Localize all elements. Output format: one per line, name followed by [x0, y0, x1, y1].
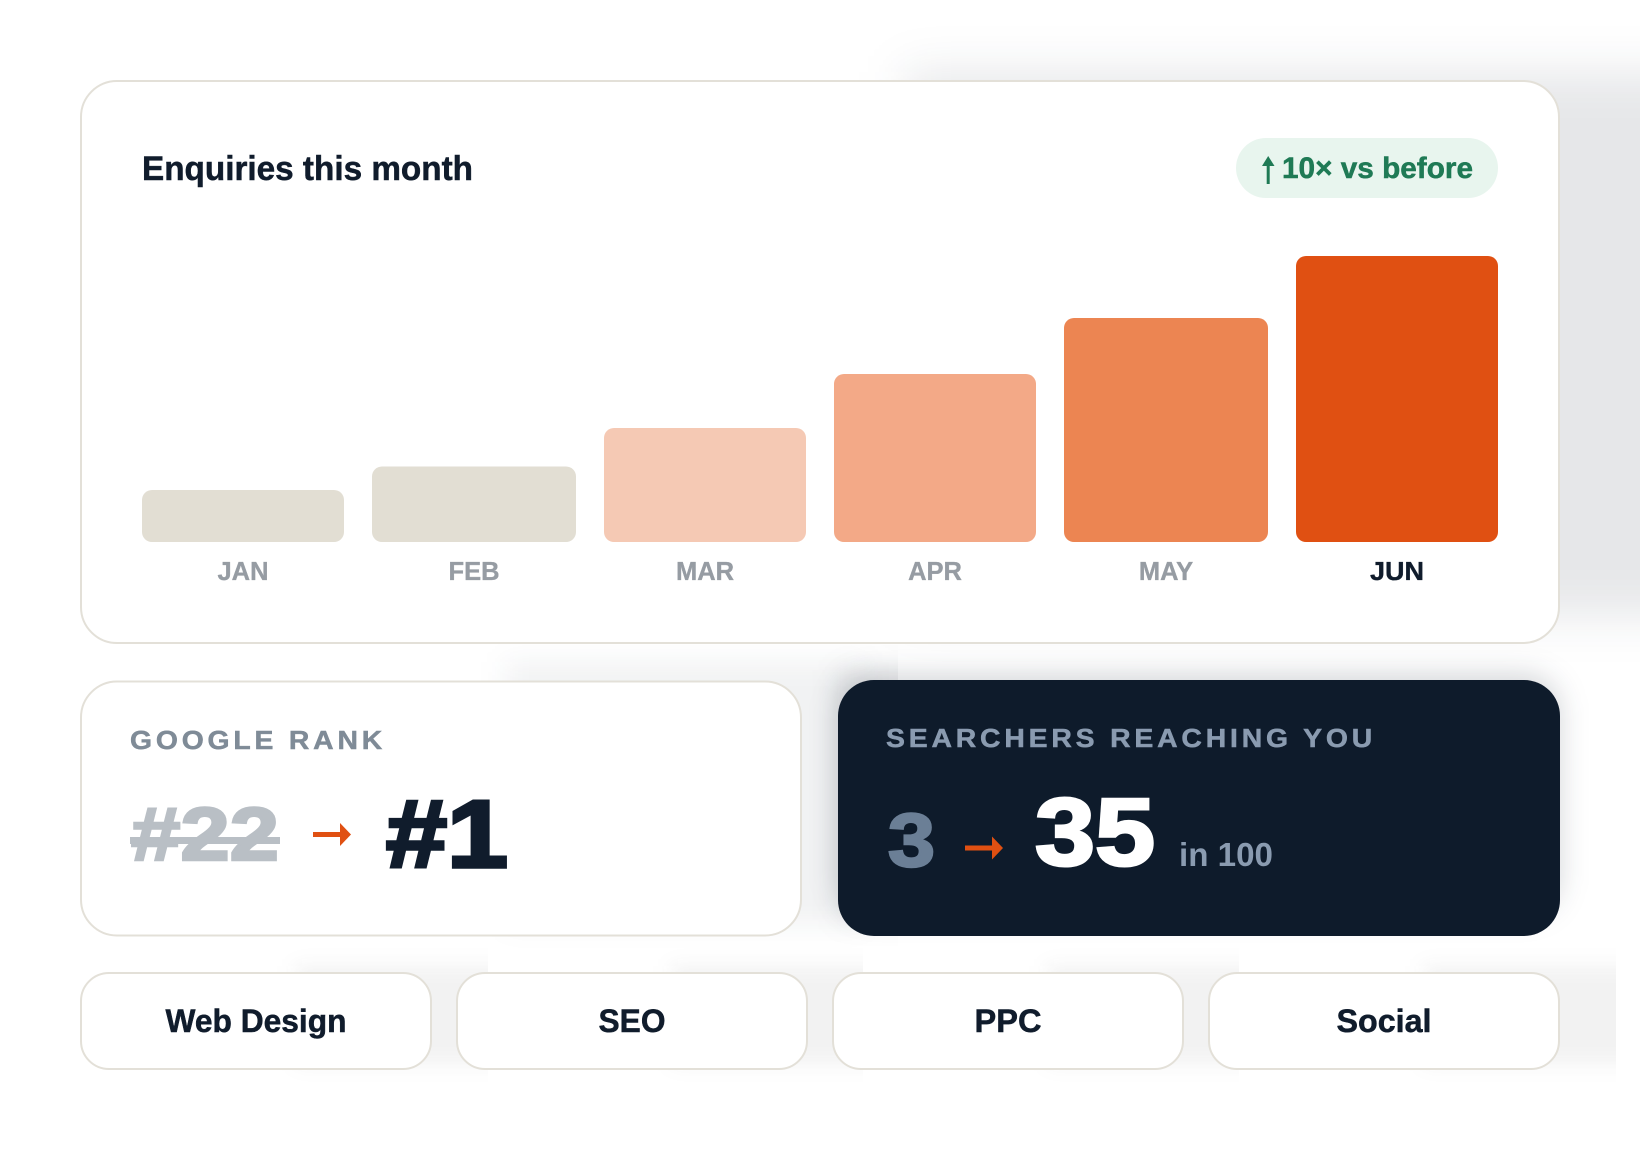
service pill: social: Social: [1336, 1003, 1432, 1039]
panel: google rank: [81, 682, 801, 936]
service pill: seo: SEO: [598, 1003, 666, 1039]
arrow: [313, 823, 351, 846]
old rank: #22 struck through: #22: [131, 792, 279, 876]
bar: May: [1064, 318, 1268, 542]
panel: searchers reaching you: [838, 680, 1560, 936]
service pill: seo: [457, 973, 807, 1069]
bar: February: [372, 466, 576, 542]
label: google rank: GOOGLE RANK: [130, 725, 386, 755]
service pill: ppc: [833, 973, 1183, 1069]
soft card shadows: [295, 72, 1640, 1064]
old value: 3: 3: [888, 798, 935, 882]
bar: March: [604, 428, 806, 542]
service pill: social: [1209, 973, 1559, 1069]
unit: in 100: in 100: [1179, 836, 1273, 873]
month labels: JAN: [217, 558, 269, 586]
service pill: web design: Web Design: [166, 1003, 346, 1039]
service pill: web design: [81, 973, 431, 1069]
month labels: [217, 558, 1424, 586]
heading: enquiries this month: Enquiries this month: [142, 150, 473, 188]
bar: January: [142, 490, 344, 542]
month labels: FEB: [448, 558, 500, 586]
bar chart: [142, 256, 1498, 586]
service pill: ppc: PPC: [974, 1003, 1042, 1039]
bar: April: [834, 374, 1036, 542]
month labels: MAR: [676, 558, 734, 586]
month labels: JUN: [1370, 558, 1424, 586]
new rank: #1: #1: [386, 781, 508, 888]
arrow: [965, 836, 1003, 860]
badge: 10x vs before: 10× vs before: [1282, 152, 1473, 185]
icon: up arrow: [1262, 156, 1274, 184]
panel: enquiries chart card: [81, 81, 1559, 643]
month labels: APR: [908, 558, 962, 586]
month labels: MAY: [1139, 558, 1193, 586]
new value: 35: 35: [1035, 779, 1155, 886]
bar: June: [1296, 256, 1498, 542]
label: searchers reaching you: SEARCHERS REACHING YOU: [886, 723, 1376, 753]
badge: 10x vs before: [1236, 138, 1498, 198]
